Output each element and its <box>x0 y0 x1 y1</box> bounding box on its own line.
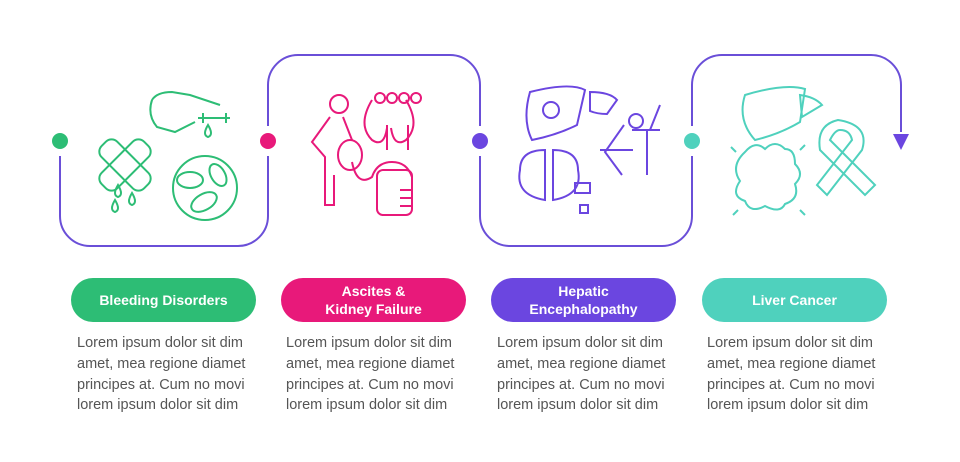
text block 3 <box>497 335 666 413</box>
text block 3: principes at. Cum no movi <box>497 377 665 393</box>
pill: hepatic: Encephalopathy <box>529 301 638 317</box>
text block 2: amet, mea regione diamet <box>286 356 454 372</box>
text block 2 <box>286 335 454 413</box>
text block 3: amet, mea regione diamet <box>497 356 665 372</box>
pill: liver cancer: Liver Cancer <box>752 292 837 308</box>
pill: ascites: Ascites & <box>342 283 405 299</box>
pill: ascites: Kidney Failure <box>325 301 422 317</box>
text block 2: lorem ipsum dolor sit dim <box>286 397 447 413</box>
pill: bleeding disorders <box>71 278 256 322</box>
pill: hepatic <box>491 278 676 322</box>
text block 4: Lorem ipsum dolor sit dim <box>707 335 873 351</box>
pill: bleeding disorders: Bleeding Disorders <box>99 292 228 308</box>
text block 3: lorem ipsum dolor sit dim <box>497 397 658 413</box>
text block 4 <box>707 335 876 413</box>
text block 3: Lorem ipsum dolor sit dim <box>497 335 663 351</box>
text block 1: amet, mea regione diamet <box>77 356 245 372</box>
text block 4: principes at. Cum no movi <box>707 377 875 393</box>
text block 1: principes at. Cum no movi <box>77 377 245 393</box>
text block 2: principes at. Cum no movi <box>286 377 454 393</box>
pill: liver cancer <box>702 278 887 322</box>
text block 4: amet, mea regione diamet <box>707 356 875 372</box>
text block 1: Lorem ipsum dolor sit dim <box>77 335 243 351</box>
text block 2: Lorem ipsum dolor sit dim <box>286 335 452 351</box>
text block 1: lorem ipsum dolor sit dim <box>77 397 238 413</box>
pill: hepatic: Hepatic <box>558 283 609 299</box>
pill: ascites <box>281 278 466 322</box>
text block 4: lorem ipsum dolor sit dim <box>707 397 868 413</box>
text block 1 <box>77 335 246 413</box>
